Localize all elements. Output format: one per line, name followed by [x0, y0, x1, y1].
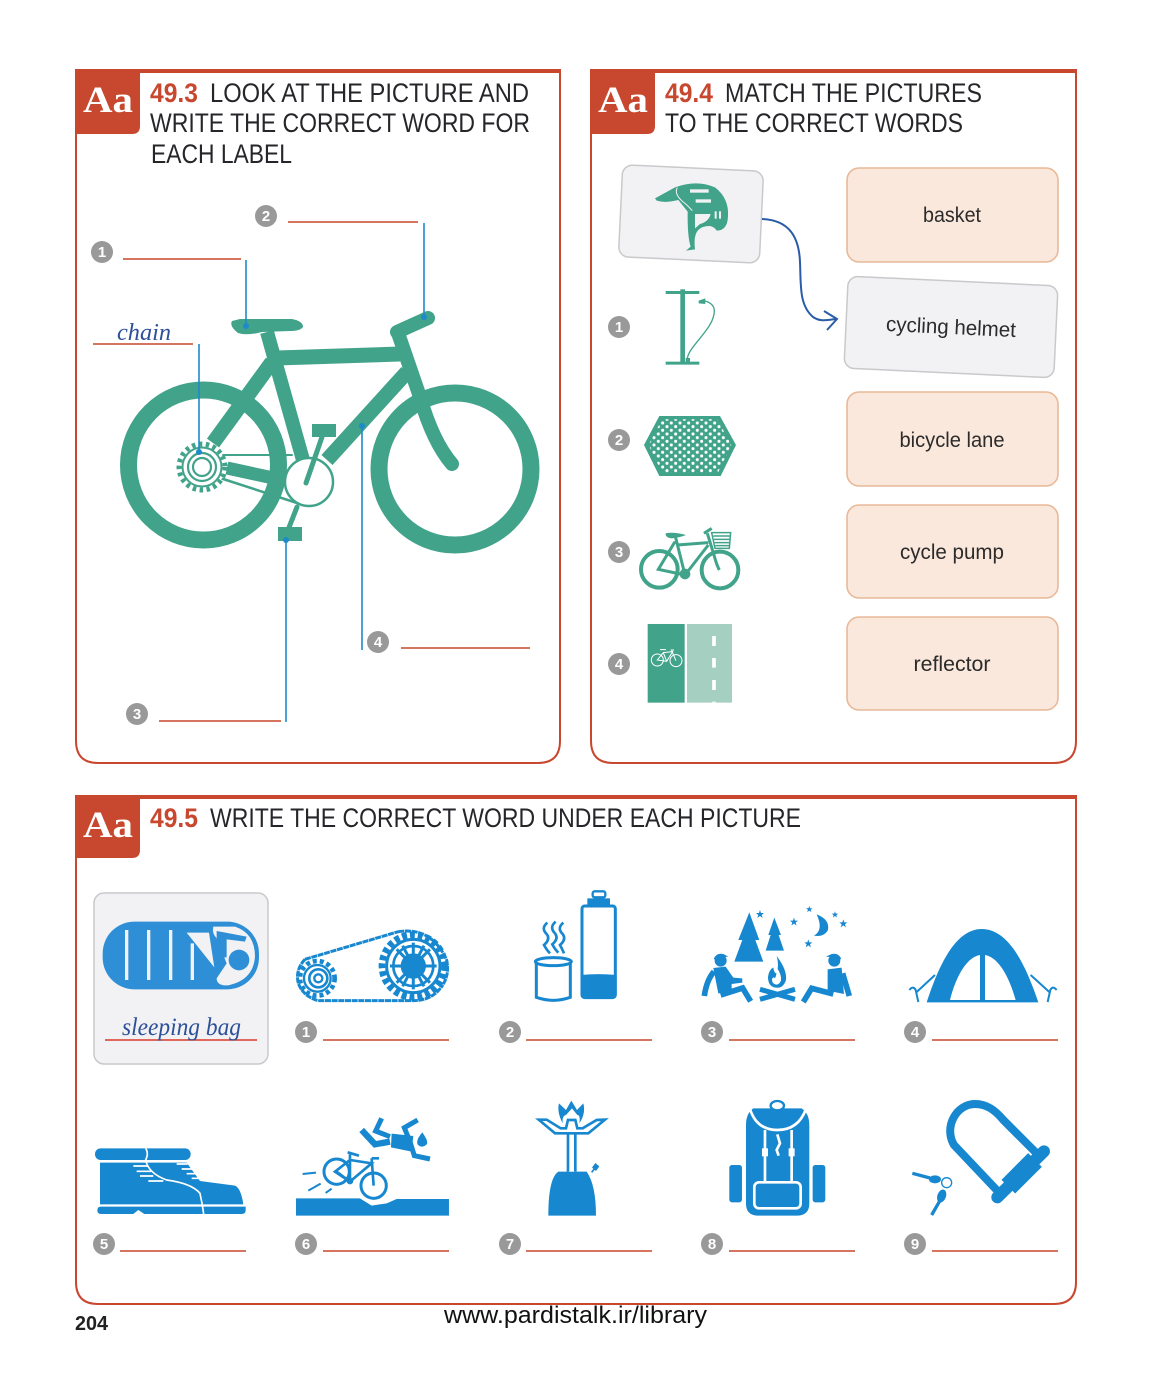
icon: Aa tab: [75, 795, 140, 858]
number badges: [91, 205, 389, 725]
word box: basket: basket: [923, 204, 981, 227]
icon: backpack: [729, 1101, 825, 1216]
icon: crash scene: [296, 1118, 449, 1216]
icon: campfire scene: [704, 906, 849, 1002]
icon: camping stove: [539, 1101, 605, 1216]
number badges: 4: [911, 1024, 920, 1041]
icon: Aa tab: [590, 69, 655, 134]
icon: Aa tab: Aa: [598, 80, 648, 121]
icon: Aa tab: [75, 69, 140, 134]
icon: bicycle lane: [648, 624, 732, 703]
icon: flask and cup: [535, 891, 617, 1000]
word box: basket: [847, 168, 1058, 262]
bicycle diagram: [128, 318, 531, 545]
heading: 49.4: TO THE CORRECT WORDS: [665, 108, 963, 138]
heading: 49.3: WRITE THE CORRECT WORD FOR: [150, 108, 530, 138]
card: sleeping bag example: sleeping bag: [122, 1014, 241, 1041]
number badges: 7: [506, 1236, 514, 1253]
number badges: 1: [98, 244, 106, 261]
number badges: 4: [374, 634, 383, 651]
card: sleeping bag example: [94, 893, 268, 1064]
heading: 49.3: 49.3: [150, 78, 198, 108]
number badges: 1: [302, 1024, 310, 1041]
icon: reflector: [644, 416, 736, 476]
icon: chain and gears: [297, 931, 448, 1001]
word box: cycle pump: cycle pump: [900, 541, 1004, 564]
number badges: 3: [133, 706, 141, 723]
icon: D-lock and keys: [912, 1104, 1044, 1215]
word box: cycle pump: [847, 505, 1058, 598]
number badges: 4: [615, 656, 624, 673]
heading: 49.3: EACH LABEL: [151, 139, 292, 169]
arrow: example match: [762, 219, 837, 330]
heading: 49.5: 49.5: [150, 803, 198, 833]
word box: bicycle lane: [847, 392, 1058, 486]
heading: 49.4: [665, 78, 982, 138]
number badges: 1: [615, 319, 623, 336]
panel: 49.5 write the word: [75, 795, 1077, 1304]
page number: 204: [75, 1313, 109, 1335]
icon: tent: [909, 929, 1057, 1002]
icon: bicycle with basket: [641, 528, 738, 588]
answer lines: [120, 1040, 1058, 1251]
number badges: 9: [911, 1236, 919, 1253]
handwritten answer: chain: chain: [117, 320, 171, 346]
answer lines: [93, 222, 530, 721]
number badges: 2: [615, 432, 623, 449]
number badges: [608, 316, 630, 675]
number badges: 3: [708, 1024, 716, 1041]
heading: 49.3: [150, 78, 530, 169]
panel: 49.3 label the bicycle: [75, 69, 561, 763]
icon: Aa tab: Aa: [83, 805, 133, 846]
heading: 49.3: LOOK AT THE PICTURE AND: [210, 78, 529, 108]
heading: 49.4: 49.4: [665, 78, 713, 108]
word box: reflector: [847, 617, 1058, 710]
icon: Aa tab: Aa: [83, 80, 133, 121]
heading: 49.4: MATCH THE PICTURES: [725, 78, 982, 108]
panel: 49.4 match pictures: [590, 69, 1077, 763]
leader lines with dots: [196, 223, 427, 722]
icon: pump: [666, 289, 714, 365]
word box: cycling helmet: cycling helmet: [886, 313, 1017, 342]
number badges: 3: [615, 544, 623, 561]
number badges: 2: [262, 208, 270, 225]
number badges: 5: [100, 1236, 108, 1253]
card: helmet example: [618, 165, 764, 263]
word box: bicycle lane: bicycle lane: [900, 429, 1004, 452]
word box: cycling helmet: [844, 276, 1058, 378]
number badges: [93, 1021, 926, 1255]
number badges: 8: [708, 1236, 716, 1253]
number badges: 2: [506, 1024, 514, 1041]
heading: 49.5: WRITE THE CORRECT WORD UNDER EACH PICTURE: [210, 803, 801, 833]
number badges: 6: [302, 1236, 310, 1253]
icon: boots: [95, 1148, 246, 1214]
word box: reflector: reflector: [914, 653, 991, 676]
website url: www.pardistalk.ir/library: [443, 1302, 707, 1329]
